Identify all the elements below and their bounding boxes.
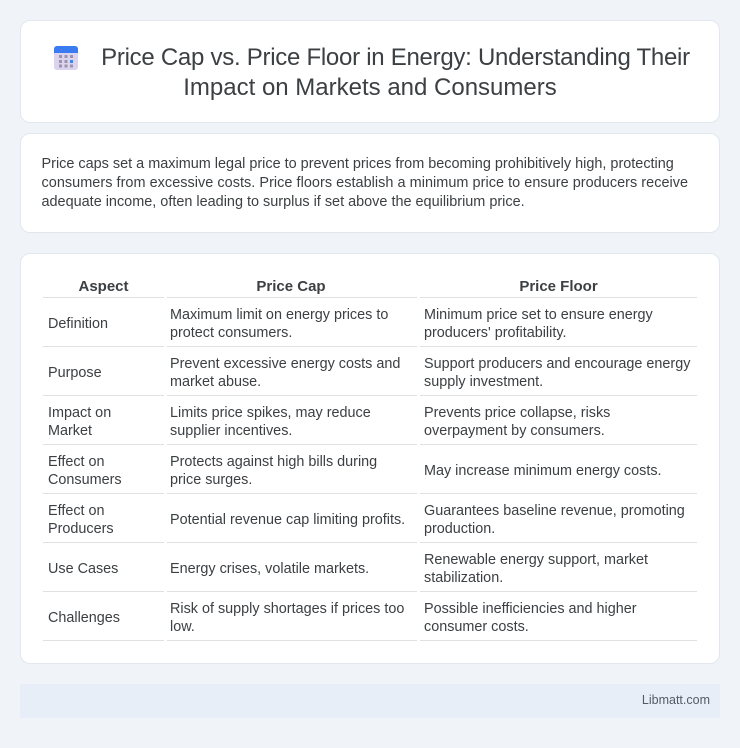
row: challenges: Risk of supply shortages if prices too (170, 601, 404, 617)
row: challenges: Challenges (48, 610, 120, 626)
row: purpose: Prevent excessive energy costs and (170, 356, 400, 372)
table header: price cap: Price Cap (256, 278, 326, 295)
panel: intro (20, 133, 720, 233)
row: definition: Minimum price set to ensure energy (424, 307, 653, 323)
row: challenges (48, 601, 637, 635)
row: effect on producers (48, 503, 685, 537)
row: purpose: Support producers and encourage energy (424, 356, 690, 372)
row: effect on producers: Guarantees baseline revenue, promoting (424, 503, 685, 519)
row: impact on market: Market (48, 423, 92, 439)
row: use cases: Use Cases (48, 561, 118, 577)
row: definition: producers' profitability. (424, 325, 566, 341)
row: effect on consumers: May increase minimum energy costs. (424, 463, 662, 479)
row: effect on consumers (48, 454, 662, 488)
row: effect on consumers: Effect on (48, 454, 105, 470)
icon: calendar (54, 46, 78, 70)
row: effect on producers: Potential revenue cap limiting profits. (170, 512, 405, 528)
footer bar (20, 684, 720, 718)
panel: header (20, 20, 720, 123)
text: intro: consumers from excessive costs. Price floors establish a minimum price to ensure producers receive (42, 175, 688, 191)
table header: price floor: Price Floor (519, 278, 598, 295)
row: purpose (48, 356, 690, 390)
row: effect on producers: Effect on (48, 503, 105, 519)
row: purpose: supply investment. (424, 374, 543, 390)
row: impact on market: Limits price spikes, may reduce (170, 405, 371, 421)
row: definition: Maximum limit on energy prices to (170, 307, 388, 323)
row: use cases (48, 552, 648, 586)
row: effect on consumers: Protects against high bills during (170, 454, 377, 470)
text: intro: Price caps set a maximum legal price to prevent prices from becoming prohibitively high, protecting (42, 156, 674, 172)
title: Price Cap vs. Price Floor in Energy: Understanding Their (101, 44, 690, 71)
row: challenges: consumer costs. (424, 619, 529, 635)
row: use cases: Renewable energy support, market (424, 552, 648, 568)
row: impact on market: supplier incentives. (170, 423, 292, 439)
row: challenges: low. (170, 619, 195, 635)
row: purpose: Purpose (48, 365, 102, 381)
row: definition: protect consumers. (170, 325, 292, 341)
row: impact on market (48, 405, 610, 439)
title (101, 44, 690, 101)
title: Impact on Markets and Consumers (183, 74, 557, 101)
row: effect on consumers: Consumers (48, 472, 122, 488)
row: impact on market: overpayment by consumers. (424, 423, 605, 439)
row: definition (48, 307, 653, 341)
row: impact on market: Prevents price collapse, risks (424, 405, 610, 421)
row: challenges: Possible inefficiencies and higher (424, 601, 637, 617)
footer credit: Libmatt.com (642, 693, 710, 707)
panel: comparison table (20, 253, 720, 664)
table rules (43, 297, 697, 641)
text: intro (42, 156, 688, 210)
row: purpose: market abuse. (170, 374, 261, 390)
row: effect on producers: Producers (48, 521, 114, 537)
text: intro: adequate income, often leading to surplus if set above the equilibrium price. (42, 194, 525, 210)
row: effect on producers: production. (424, 521, 495, 537)
row: impact on market: Impact on (48, 405, 111, 421)
table header: aspect: Aspect (78, 278, 129, 295)
row: use cases: Energy crises, volatile markets. (170, 561, 369, 577)
row: use cases: stabilization. (424, 570, 503, 586)
row: effect on consumers: price surges. (170, 472, 252, 488)
row: definition: Definition (48, 316, 108, 332)
